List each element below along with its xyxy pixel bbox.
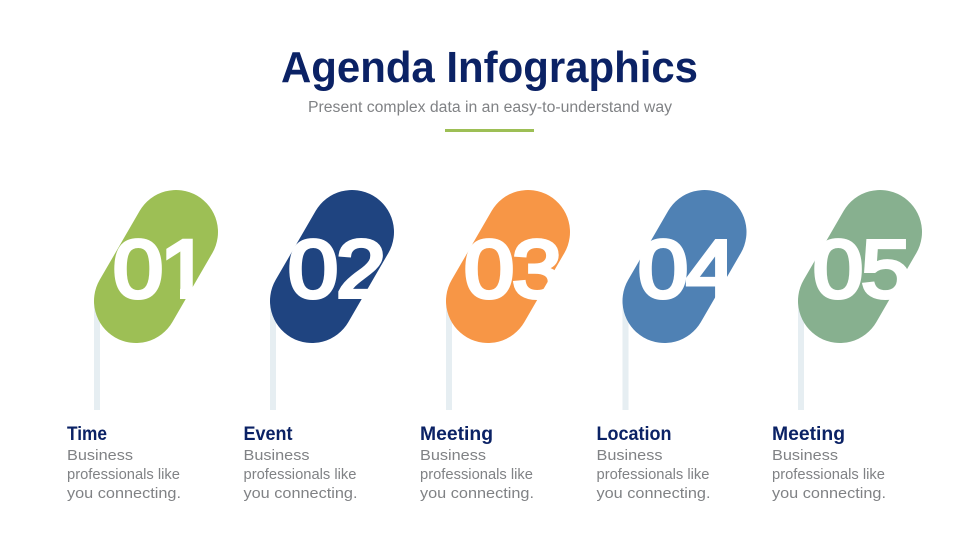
label 4: professionals like [596, 466, 710, 483]
label 1 [67, 424, 181, 502]
label 3: Meeting [420, 424, 493, 445]
subtitle: Present complex data in an easy-to-understand way [308, 99, 672, 116]
item 1: Time [67, 224, 208, 502]
stem 1 [94, 300, 100, 410]
number 04: 04 [638, 224, 734, 315]
stem 5 [798, 300, 804, 410]
label 4: Business [596, 447, 662, 464]
item 3: Meeting [420, 224, 560, 502]
pill 5 [840, 232, 880, 301]
label 5: you connecting. [772, 485, 886, 502]
label 3: Business [420, 447, 486, 464]
pill 1 [136, 232, 176, 301]
item 5: Meeting [772, 224, 909, 502]
label 3: you connecting. [420, 485, 534, 502]
pill 3 [488, 232, 528, 301]
label 5: Business [772, 447, 838, 464]
stem 4 [622, 300, 628, 410]
label 2: you connecting. [244, 485, 358, 502]
label 1: professionals like [67, 466, 180, 483]
stem 3 [446, 300, 452, 410]
item 4: Location [596, 224, 734, 502]
title: Agenda Infographics [281, 43, 698, 92]
item 2: Event [244, 224, 384, 502]
stem 2 [270, 300, 276, 410]
number 01: 01 [113, 224, 208, 315]
label 4: Location [596, 424, 672, 445]
label 2: professionals like [244, 466, 356, 483]
label 3: professionals like [420, 466, 533, 483]
pill 2 [312, 232, 352, 301]
label 4 [596, 424, 710, 502]
title underline [445, 129, 534, 132]
label 1: you connecting. [67, 485, 181, 502]
label 1: Business [67, 447, 133, 464]
label 2 [244, 424, 358, 502]
number 02: 02 [288, 224, 384, 315]
label 3 [420, 424, 534, 502]
number 05: 05 [813, 224, 909, 315]
label 1: Time [67, 424, 107, 445]
label 5: Meeting [772, 424, 845, 445]
number 03: 03 [464, 224, 560, 315]
label 5 [772, 424, 886, 502]
label 4: you connecting. [596, 485, 710, 502]
label 5: professionals like [772, 466, 885, 483]
label 2: Event [244, 424, 293, 445]
pill 4 [664, 232, 704, 301]
label 2: Business [244, 447, 310, 464]
